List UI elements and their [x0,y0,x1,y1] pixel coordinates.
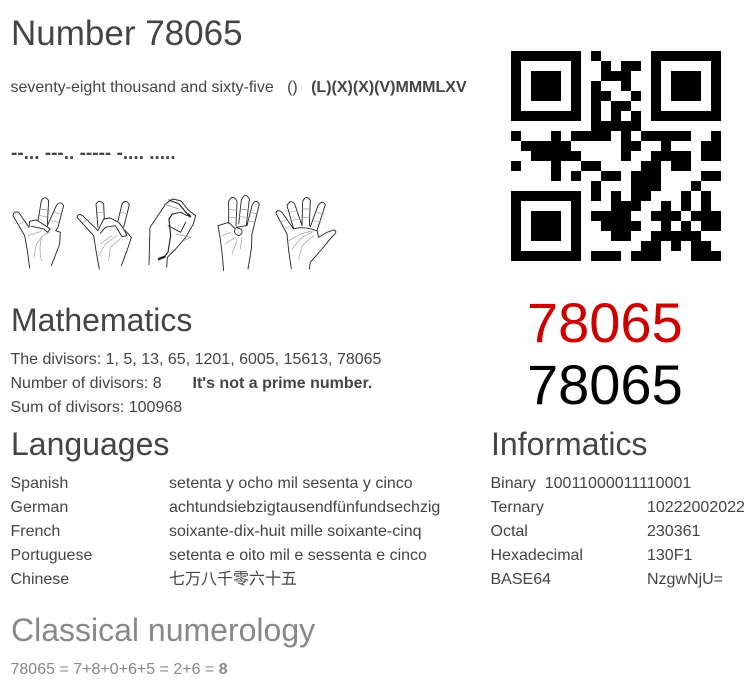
heading: informatics: Informatics [491,426,647,462]
table: languages: achtundsiebzigtausendfünfundsechzig [169,499,440,516]
table: languages: Portuguese [10,547,92,564]
icon: sign language hands [12,195,336,272]
text block: numerology sum: 78065 = 7+8+0+6+5 = 2+6 = 8 [10,661,228,678]
QR code [511,51,721,261]
table: informatics: Hexadecimal [490,547,583,564]
table: informatics: 230361 [647,523,700,540]
number in words and roman numerals: seventy-eight thousand and sixty-five () (L)(X)(X)(V)MMMLXV [10,79,467,96]
text block: divisors: Number of divisors: 8 [10,375,162,392]
table: languages: Chinese [10,571,69,588]
heading: languages: Languages [11,426,169,462]
text block: divisors: Sum of divisors: 100968 [10,399,182,416]
table: informatics: BASE64 [490,571,551,588]
title: Number 78065 [11,14,243,53]
table: informatics: NzgwNjU= [647,571,723,588]
table: languages: French [10,523,60,540]
table: informatics: 10222002022 [647,499,745,516]
text block: divisors: It's not a prime number. [192,375,372,392]
heading: mathematics: Mathematics [11,302,192,338]
table: languages: German [10,499,68,516]
table: informatics: Octal [490,523,528,540]
large number in black: 78065 [527,353,683,416]
text block: divisors [10,351,381,416]
table: informatics: Binary 10011000011110001 [490,475,691,492]
table: languages: Spanish [10,475,68,492]
text block: divisors: The divisors: 1, 5, 13, 65, 1201, 6005, 15613, 78065 [10,351,381,368]
table: languages [10,475,440,588]
table: languages: soixante-dix-huit mille soixante-cinq [169,523,422,540]
table: languages: setenta y ocho mil sesenta y cinco [169,475,413,492]
table: informatics [490,475,745,588]
large number in red: 78065 [527,291,683,354]
table: informatics: 130F1 [647,547,692,564]
heading: classical numerology: Classical numerology [11,612,315,648]
table: informatics: Ternary [490,499,544,516]
morse code: --... ---.. ----- -.... ..... [11,143,176,164]
table: languages: setenta e oito mil e sessenta e cinco [169,547,427,564]
table: languages: 七万八千零六十五 [169,571,297,588]
